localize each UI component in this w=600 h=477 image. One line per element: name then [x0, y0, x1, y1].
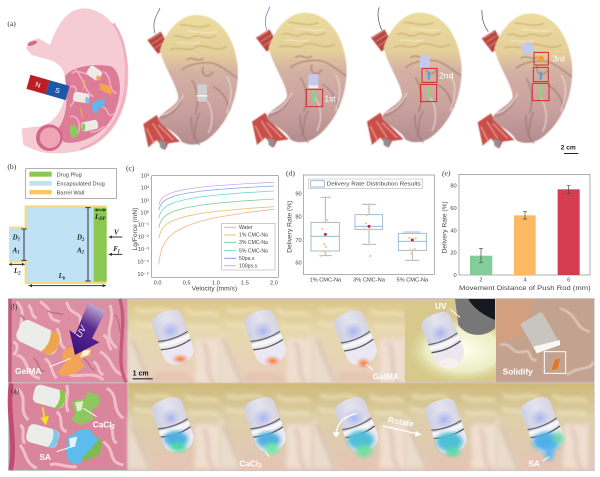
stomach photo 4: 3rd release [478, 10, 572, 148]
chart (c): force vs velocity: 10² [141, 186, 149, 192]
barrel diagram: L [59, 272, 63, 280]
legend (c): 50pa.s [239, 256, 255, 262]
magnet: N [34, 82, 41, 90]
capsule with orange plug [14, 318, 63, 357]
legend (d): Delivery Rate Distribution Results [327, 181, 421, 187]
photo row (g): capsule with SA and CaCl2: SA [528, 459, 540, 469]
barrel diagram: A [13, 246, 17, 254]
chart (c): force vs velocity [132, 174, 278, 292]
capsule blue end [25, 423, 61, 449]
chart (e): delivery rate vs push rod distance: 4 [523, 277, 527, 283]
stomach photo 4: 3rd release: 3rd [552, 53, 565, 63]
legend: materials: Barrel Wall [57, 190, 84, 196]
rotate annotation [333, 413, 422, 438]
barrel diagram: b [63, 276, 66, 281]
pylorus ring [36, 124, 63, 151]
stomach photo 2: 1st release: 1st [324, 93, 336, 103]
panel label (d): (d) [286, 169, 295, 178]
chart (e): delivery rate vs push rod distance: 60 [450, 206, 457, 212]
orange GelMA blob [57, 345, 92, 377]
panel (b): barrel schematic [7, 162, 591, 292]
stomach photo 3: 2nd release: 2nd [439, 71, 454, 81]
panel (g) illustration: SA and CaCl2: 2 [112, 424, 116, 430]
legend: materials: Drug Plug [57, 172, 82, 178]
panel label (a): (a) [7, 19, 16, 28]
rotate annotation: Rotate [387, 414, 415, 429]
photo: UV exposure: UV [435, 301, 447, 311]
barrel diagram: L [14, 267, 18, 275]
UV arrow: UV [74, 323, 89, 339]
panel (g) illustration: SA and CaCl2 [9, 383, 127, 470]
stomach photo 1 [143, 8, 238, 150]
capsule photos [150, 307, 381, 370]
chart (e): delivery rate vs push rod distance: Delivery Rate (%) [442, 201, 449, 253]
photo row (g): capsule with SA and CaCl2 [128, 383, 594, 470]
yellow arrow [42, 407, 48, 424]
panel (f) illustration: GelMA: (f) [10, 303, 18, 311]
chart (d): delivery rate box plot: Delivery Rate (%) [286, 201, 293, 253]
curves [159, 182, 274, 264]
barrel diagram: 2 [17, 271, 21, 276]
chart (e): delivery rate vs push rod distance: 2 [479, 277, 483, 283]
panel label (c): (c) [126, 164, 135, 173]
barrel diagram: V [114, 228, 120, 236]
red boxes 2nd [421, 68, 437, 102]
stomach photo 2: 1st release [252, 7, 347, 148]
panel label (e): (e) [442, 169, 451, 178]
chart (e): delivery rate vs push rod distance: 20 [450, 251, 457, 257]
panel label (b): (b) [7, 162, 17, 171]
chart (d): delivery rate box plot: 60 [295, 261, 302, 267]
scale bar 2 cm [561, 145, 578, 154]
chart (c): force vs velocity: 1.0 [212, 281, 220, 287]
chart (e): delivery rate vs push rod distance: 40 [450, 228, 457, 234]
legend (c): 3% CMC-Na [239, 240, 268, 246]
barrel diagram: 2 [81, 238, 85, 243]
red boxes 3rd [532, 52, 549, 101]
chart (e): delivery rate vs push rod distance: 0 [454, 273, 457, 279]
magnet: S [54, 87, 61, 95]
chart (c): force vs velocity: 0.0 [154, 281, 162, 287]
photo: solidify: Solidify [503, 366, 533, 376]
barrel diagram: f [118, 249, 120, 254]
stomach photo 3: 2nd release [367, 7, 462, 148]
chart (e): delivery rate vs push rod distance: 6 [567, 277, 570, 283]
chart (e): delivery rate vs push rod distance [442, 174, 591, 292]
photo row (g): capsule with SA and CaCl2: 2 [258, 463, 262, 469]
barrel diagram: L [95, 213, 99, 221]
chart (c): force vs velocity: 10⁻⁴ [137, 259, 150, 266]
SA blob [80, 435, 102, 462]
chart (d): delivery rate box plot: 80 [295, 215, 302, 221]
stomach illustration [22, 8, 128, 153]
legend (c): Water [239, 225, 253, 231]
barrel diagram: D [13, 233, 18, 241]
legend (d) [308, 179, 423, 188]
photo row (f): capsule with GelMA: GelMA [373, 372, 399, 382]
photo row (g): capsule with SA and CaCl2: CaCl [239, 459, 258, 469]
CaCl2 blob [72, 392, 100, 425]
panel (g) illustration: SA and CaCl2: (g) [11, 387, 20, 395]
chart (e): delivery rate vs push rod distance: 80 [450, 184, 457, 190]
chart (d): delivery rate box plot: 5% CMC-Na [396, 277, 429, 283]
panel (f) illustration: GelMA [9, 299, 127, 382]
chart (c): force vs velocity: Lg/Force (mN) [132, 208, 139, 250]
bars [470, 256, 492, 275]
legend (c): 1% CMC-Na [239, 233, 268, 239]
chart (d): delivery rate box plot: 90 [295, 191, 302, 197]
barrel diagram: 1 [18, 238, 20, 243]
chart (c): force vs velocity: 10⁰ [140, 209, 150, 216]
capsules and drug blobs [70, 65, 113, 138]
chart (c): force vs velocity: 10³ [141, 174, 149, 180]
chart (c): force vs velocity: 1.5 [241, 281, 249, 287]
chart (c): force vs velocity: Velocity (mm/s) [192, 285, 237, 292]
chart (c): force vs velocity: 10⁻³ [138, 247, 149, 253]
barrel diagram: D [77, 234, 82, 242]
barrel diagram: A [77, 246, 82, 254]
panel (g) illustration: SA and CaCl2: SA [39, 452, 51, 462]
magnet [26, 75, 70, 100]
photo: UV exposure [405, 299, 520, 383]
chart (d): delivery rate box plot: 70 [295, 238, 302, 244]
chart (c): force vs velocity: 0.5 [183, 281, 191, 287]
red box 1st [306, 89, 323, 107]
photo row (f): capsule with GelMA [128, 299, 405, 382]
barrel diagram: 2 [81, 251, 85, 256]
barrel diagram: F [113, 245, 118, 253]
panel (f) illustration: GelMA: GelMA [15, 366, 41, 376]
chart (c): force vs velocity: 10¹ [141, 198, 149, 204]
panels (f) and (g) [8, 298, 595, 471]
panel (g) illustration: SA and CaCl2: CaCl [93, 420, 112, 430]
sample points [319, 196, 417, 261]
stomach inner mucosa [58, 65, 120, 143]
chart (e): delivery rate vs push rod distance: Movement Distance of Push Rod (mm) [459, 285, 591, 292]
barrel diagram [9, 206, 122, 287]
chart (c): force vs velocity: 10⁻⁵ [137, 271, 149, 278]
photo: solidify [496, 299, 594, 382]
chart (d): delivery rate box plot [286, 175, 434, 283]
scale bar 2 cm: 2 cm [561, 145, 576, 152]
capsule green end [31, 384, 67, 410]
scale bar 1 cm: 1 cm [133, 370, 149, 377]
chart (c): force vs velocity: 10⁻¹ [138, 222, 149, 228]
chart (c): force vs velocity: 2.0 [270, 281, 278, 287]
chart (c): force vs velocity: 10⁻² [138, 235, 149, 241]
capsule photos [150, 394, 567, 461]
chart (d): delivery rate box plot: 3% CMC-Na [353, 277, 386, 283]
legend (c): 5% CMC-Na [239, 248, 268, 254]
scale bar 1 cm [133, 370, 153, 379]
legend (c) [222, 223, 275, 270]
chart (d): delivery rate box plot: 1% CMC-Na [309, 277, 342, 283]
legend (c): 100ps.s [239, 263, 257, 269]
barrel diagram: 1 [17, 251, 20, 256]
panel (a): stomach illustrations and photos [7, 7, 578, 154]
legend: materials: Encapsulated Drug [57, 182, 105, 188]
legend: materials [26, 169, 117, 198]
barrel diagram: DP [98, 217, 106, 222]
